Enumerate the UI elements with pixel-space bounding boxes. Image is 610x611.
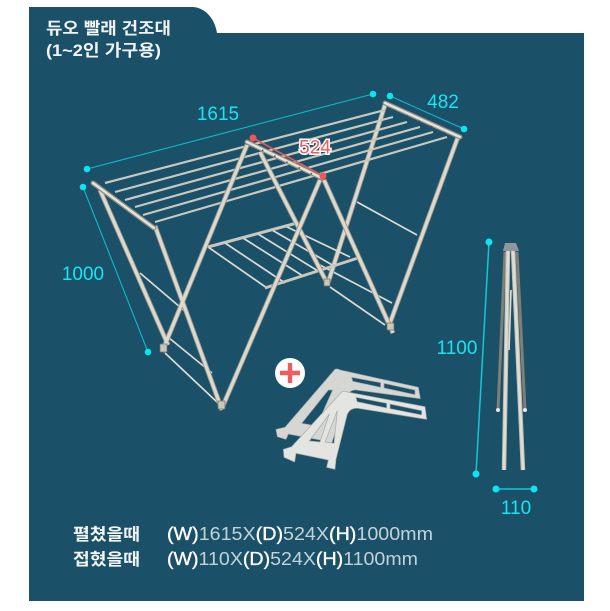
heading [46,19,171,60]
dimension: 1100: 1100 [437,338,477,359]
far legs [328,105,458,323]
dimension: 524 [250,134,331,180]
icon: plus [275,358,305,388]
extra brackets [276,369,427,469]
lower rails [140,202,417,403]
dimension: 482 [387,92,467,132]
foot joints [160,279,394,409]
dimension: 1000: 1000 [62,264,104,285]
end and crossing legs [100,145,393,410]
spec: folded size: (W)110X(D)524X(H)1100mm [167,549,418,569]
bracket: front [283,391,427,469]
drying rack: folded view [496,243,527,470]
dimension: 1615 [84,91,376,172]
heading: (1~2인 가구용) [46,41,161,60]
spec: unfolded size: 펼쳤을때 [73,525,140,544]
bracket: back [276,369,420,448]
dimension: 1100 [437,238,492,478]
dimension: 524: 524 [299,138,331,158]
dimension: 110: 110 [501,498,531,519]
drying rack: open view [93,103,460,410]
spec: unfolded size: (W)1615X (D)524X(H)1000mm [167,524,433,544]
middle rear legs [260,152,327,283]
lower shelf [208,223,358,288]
dimension: 1615: 1615 [197,104,239,125]
red depth line [253,138,323,176]
dimension: 110 [492,486,538,519]
dimension: 482: 482 [427,92,459,113]
top end bars [93,103,460,228]
top hanging rails [105,110,447,222]
spec: folded size: 접혔을때 [73,550,140,569]
dimension: 1000 [62,184,151,355]
heading: 듀오 빨래 건조대 [46,19,171,38]
